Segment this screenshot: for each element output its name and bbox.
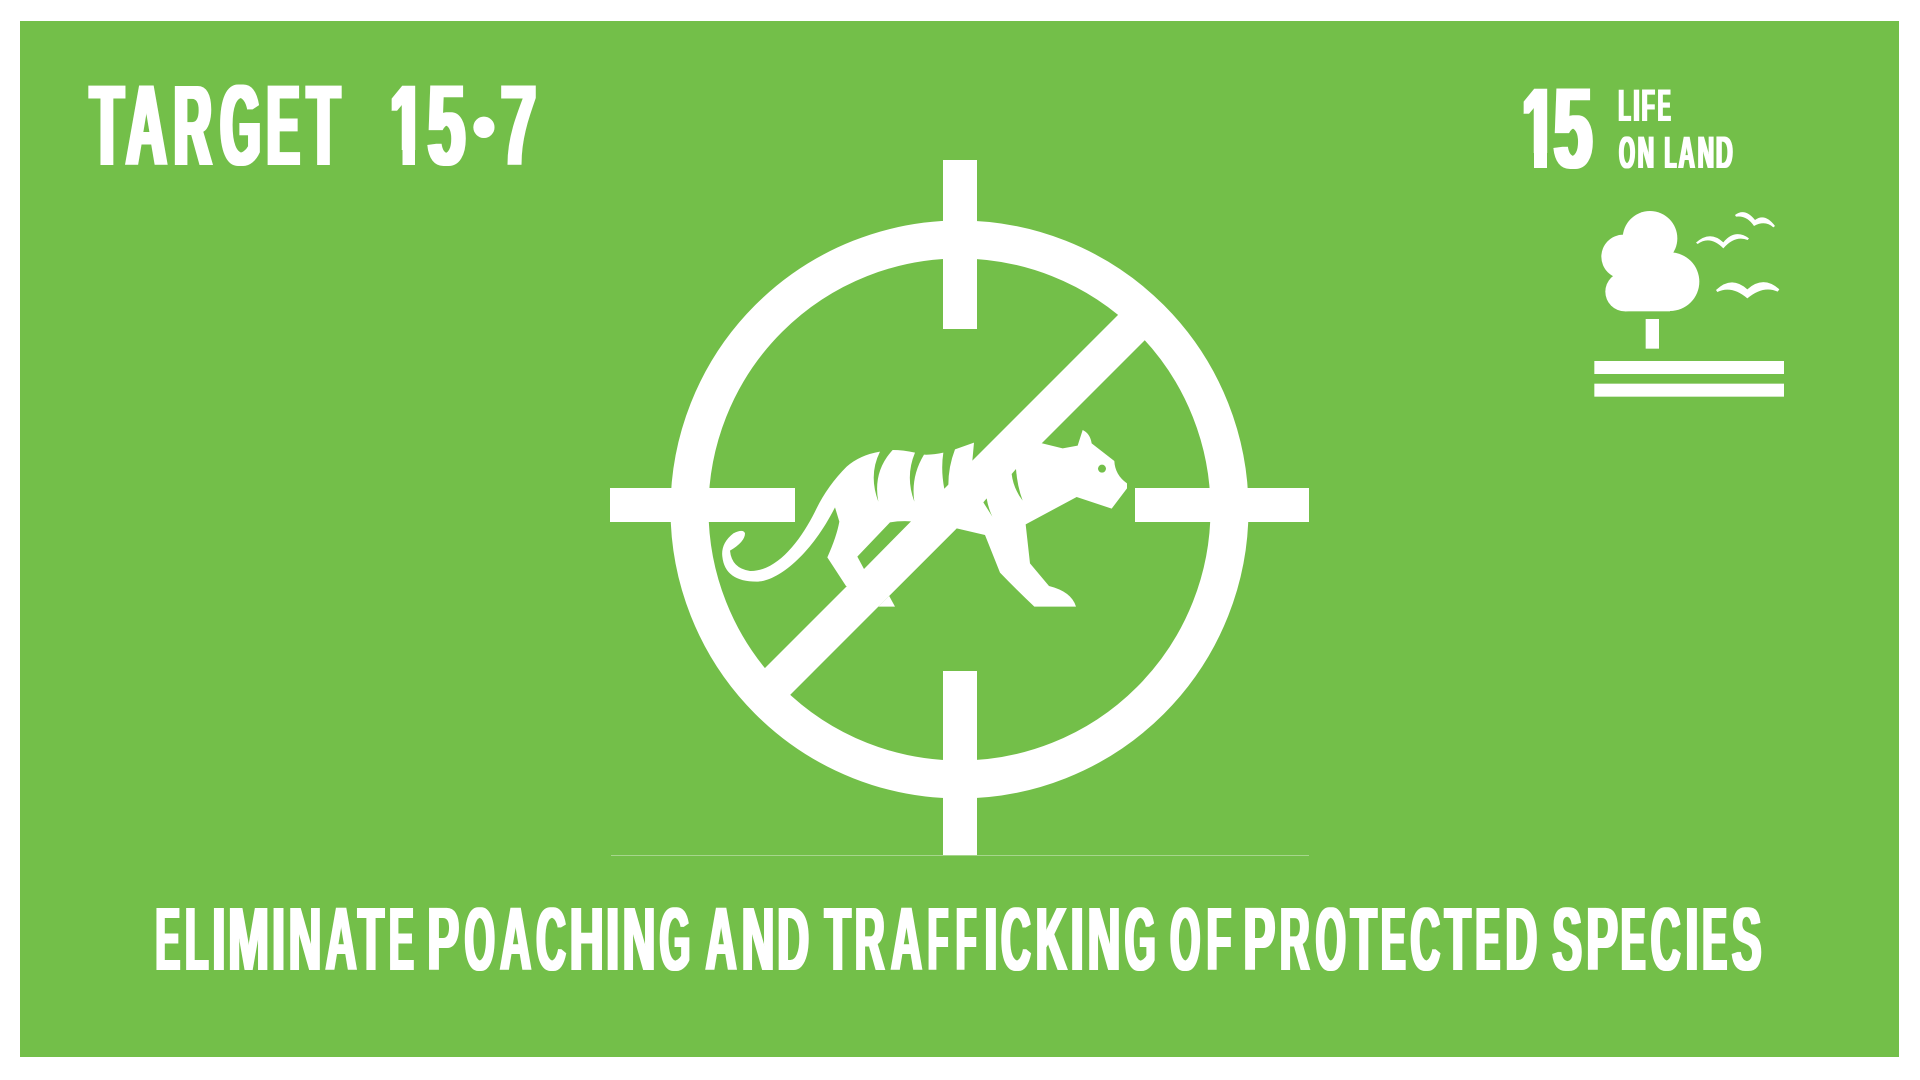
caption: E: [389, 890, 414, 990]
goal name: [1618, 80, 1733, 178]
goal number: 1: [1522, 65, 1556, 193]
caption: C: [1410, 890, 1440, 990]
caption: E: [1476, 890, 1500, 990]
caption: P: [1586, 890, 1618, 990]
goal name: N: [1698, 127, 1714, 178]
caption: G: [660, 890, 690, 990]
goal name: L: [1618, 80, 1631, 131]
goal name: E: [1658, 80, 1671, 131]
caption: C: [536, 890, 566, 990]
caption: I: [984, 890, 998, 990]
caption: I: [1685, 890, 1699, 990]
crosshair target: [610, 160, 1309, 855]
title: Target 15.7: G: [220, 62, 260, 190]
goal name: I: [1633, 80, 1640, 131]
caption: P: [1244, 890, 1275, 990]
title: Target 15.7: T: [90, 62, 124, 190]
icon: tree, birds and ground: [1594, 211, 1784, 397]
goal name: L: [1664, 127, 1676, 178]
caption: A: [706, 890, 737, 990]
tiger stripes and eye: [983, 465, 1106, 517]
caption: C: [1001, 890, 1031, 990]
prohibition slash: [751, 301, 1158, 708]
title: Target 15.7: 7: [501, 62, 536, 190]
caption: O: [1316, 890, 1346, 990]
caption: T: [1351, 890, 1377, 990]
goal name: N: [1638, 127, 1654, 178]
title: Target 15.7: 1: [390, 62, 424, 190]
caption: T: [358, 890, 384, 990]
caption: N: [623, 890, 655, 990]
caption: I: [1070, 890, 1084, 990]
goal number: 5: [1554, 65, 1592, 193]
goal name: F: [1642, 80, 1655, 131]
title: Target 15.7: A: [126, 62, 167, 190]
caption: D: [777, 890, 809, 990]
divider line: [611, 855, 1309, 856]
caption: A: [500, 890, 531, 990]
title: Target 15.7: 5: [428, 62, 465, 190]
caption: C: [1651, 890, 1680, 990]
caption: G: [1125, 890, 1156, 990]
text: S: [1732, 890, 1762, 990]
goal badge: 15 Life on Land: [1517, 65, 1784, 397]
caption: F: [1207, 890, 1231, 990]
caption: H: [570, 890, 604, 990]
caption: I: [606, 890, 619, 990]
caption: M: [228, 890, 269, 990]
caption: O: [1170, 890, 1200, 990]
caption: E: [156, 890, 180, 990]
caption: K: [1036, 890, 1067, 990]
caption: P: [427, 890, 459, 990]
goal name: A: [1678, 127, 1695, 178]
tiger silhouette: [722, 430, 1127, 607]
caption: [156, 890, 1762, 990]
title: Target 15.7: •: [471, 85, 497, 168]
caption: S: [1552, 890, 1582, 990]
title: Target 15.7: [90, 62, 536, 190]
caption: F: [928, 890, 948, 990]
caption: T: [1445, 890, 1471, 990]
caption: R: [855, 890, 885, 990]
caption: A: [891, 890, 922, 990]
caption: D: [1505, 890, 1537, 990]
title: Target 15.7: R: [174, 62, 212, 190]
caption: N: [742, 890, 774, 990]
caption: E: [1621, 890, 1646, 990]
caption: I: [272, 890, 285, 990]
caption: R: [1280, 890, 1310, 990]
caption: E: [1381, 890, 1406, 990]
caption: L: [185, 890, 208, 990]
caption: A: [326, 890, 357, 990]
caption: F: [956, 890, 976, 990]
goal name: O: [1619, 127, 1635, 178]
tiger with prohibition slash: [722, 301, 1158, 708]
caption: I: [212, 890, 226, 990]
title: Target 15.7: T: [307, 62, 340, 190]
title: Target 15.7: E: [267, 62, 300, 190]
goal name: D: [1716, 127, 1733, 178]
caption: T: [825, 890, 851, 990]
caption: E: [1702, 890, 1727, 990]
gap between legs: [857, 521, 911, 569]
caption: N: [289, 890, 321, 990]
caption: N: [1088, 890, 1120, 990]
caption: O: [465, 890, 495, 990]
